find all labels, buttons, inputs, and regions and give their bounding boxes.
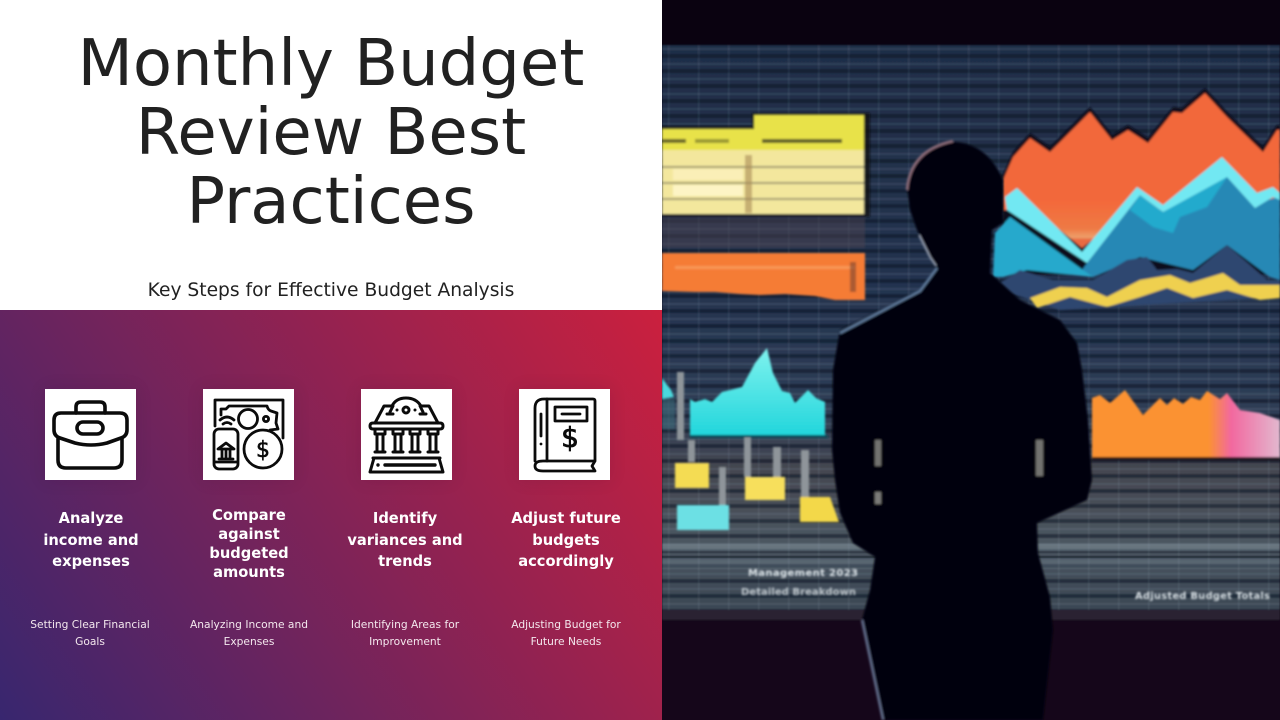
wall captions: Adjusted Budget Totals (1135, 591, 1270, 602)
step 3 heading: Identify (373, 510, 437, 527)
step 2 heading: against (218, 526, 280, 543)
step 4 note: Adjusting Budget for (511, 618, 621, 631)
yellow data table (662, 113, 870, 248)
step 1 heading (43, 510, 139, 570)
step 2 note (190, 618, 308, 648)
photo: analyst in front of a data wall (662, 0, 1280, 720)
wall captions: Management 2023 (748, 568, 858, 579)
photo backdrop (662, 0, 1280, 720)
step 4 heading: Adjust future (511, 510, 621, 527)
step 4 heading (511, 510, 621, 570)
icon: budget book (519, 389, 610, 480)
step 2 heading: amounts (213, 564, 285, 581)
subtitle: Key Steps for Effective Budget Analysis (148, 280, 514, 301)
step 2 heading (209, 507, 289, 581)
icon: briefcase (45, 389, 136, 480)
step 1 heading: expenses (52, 553, 130, 570)
step 1 heading: income and (43, 532, 139, 548)
icon: money and mobile bank (203, 389, 294, 480)
cyan area chart (662, 348, 828, 438)
step 3 heading: trends (378, 553, 432, 570)
panel: steps (0, 310, 662, 720)
step 1 note (30, 618, 150, 648)
step 1 heading: Analyze (59, 510, 123, 527)
step 1 note: Goals (75, 635, 105, 648)
step 3 heading (347, 510, 463, 570)
wall captions: Detailed Breakdown (741, 587, 856, 598)
icon: budget book: $ (561, 421, 579, 454)
step 4 heading: accordingly (518, 553, 614, 570)
wall captions (741, 568, 1270, 602)
title (78, 27, 584, 239)
step 2 note: Expenses (224, 635, 274, 648)
title: Review Best (136, 96, 526, 170)
step 2 heading: Compare (212, 507, 286, 524)
step 4 heading: budgets (532, 532, 600, 548)
step 3 heading: variances and (347, 532, 463, 548)
step 2 note: Analyzing Income and (190, 618, 308, 631)
orange and pink area chart (1092, 390, 1280, 460)
step 3 note: Improvement (369, 635, 441, 648)
step 3 note: Identifying Areas for (351, 618, 459, 631)
step 1 note: Setting Clear Financial (30, 618, 150, 631)
silhouette of man (832, 141, 1092, 720)
hanging yellow and cyan tags (675, 372, 839, 530)
step 4 note (511, 618, 621, 648)
title: Monthly Budget (78, 27, 584, 101)
orange banner chart (662, 253, 865, 300)
layered area chart (993, 88, 1280, 310)
step 3 note (351, 618, 460, 648)
step 4 note: Future Needs (531, 635, 601, 648)
icon: bank building (361, 389, 452, 480)
step 2 heading: budgeted (209, 545, 289, 562)
icon: money and mobile bank: $ (256, 438, 270, 463)
title: Practices (187, 165, 475, 239)
data wall screen (662, 45, 1280, 620)
